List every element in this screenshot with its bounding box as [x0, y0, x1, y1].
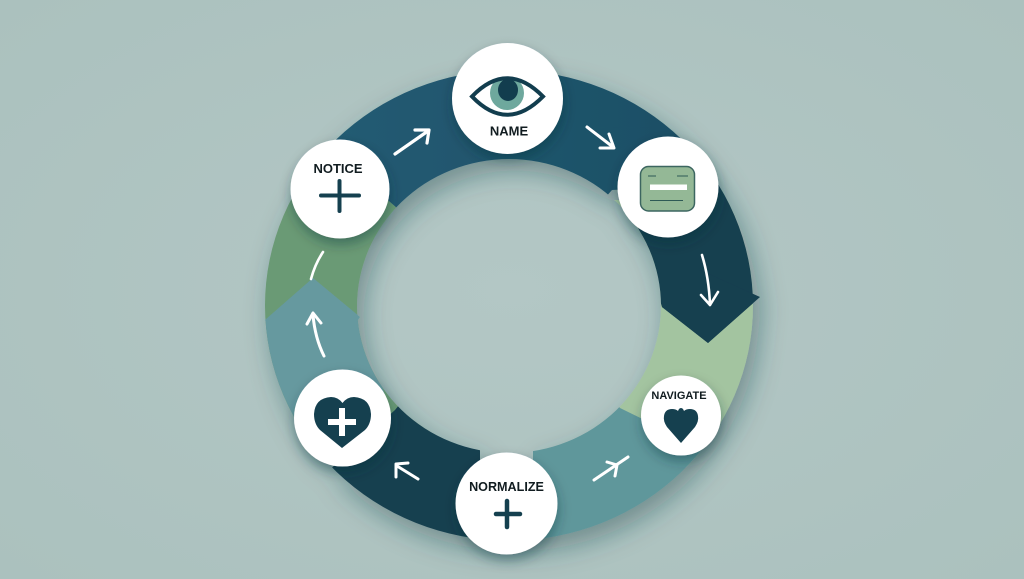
circular ring of segments — [256, 70, 775, 566]
icon: eye — [472, 76, 543, 115]
segment: top blue — [334, 70, 713, 227]
node: navigate — [641, 376, 721, 456]
icon: green card — [640, 166, 694, 211]
segment: light green right — [560, 200, 900, 579]
node: normalize — [456, 452, 558, 554]
segment: left green — [256, 195, 432, 432]
icon: heart with plus — [314, 397, 371, 448]
label: normalize: NORMALIZE — [469, 480, 544, 494]
label: navigate: NAVIGATE — [651, 390, 707, 402]
node: notice — [290, 140, 390, 238]
label: notice: NOTICE — [313, 161, 363, 176]
segment: bottom navy — [330, 406, 519, 566]
segment: left teal — [266, 278, 384, 476]
segment: lower right teal — [512, 407, 702, 566]
arrow tip: left teal — [265, 278, 360, 345]
segment: right navy — [638, 168, 753, 343]
arrow: left up — [307, 313, 324, 356]
arrow: upper right — [587, 127, 614, 148]
arrow: lower right — [594, 457, 628, 480]
node: heart — [294, 370, 391, 466]
arrow: lower left — [396, 463, 418, 479]
icon: plus — [496, 501, 520, 527]
node: name — [452, 43, 563, 154]
node: card — [618, 136, 718, 238]
icon: scalloped heart — [664, 408, 698, 443]
arrow tip: right navy — [662, 270, 760, 343]
arrow: upper left — [395, 130, 429, 154]
arrow: right — [701, 255, 718, 305]
icon: plus — [321, 181, 359, 211]
arrow: left green dash — [311, 252, 323, 279]
label: name: NAME — [490, 124, 528, 138]
